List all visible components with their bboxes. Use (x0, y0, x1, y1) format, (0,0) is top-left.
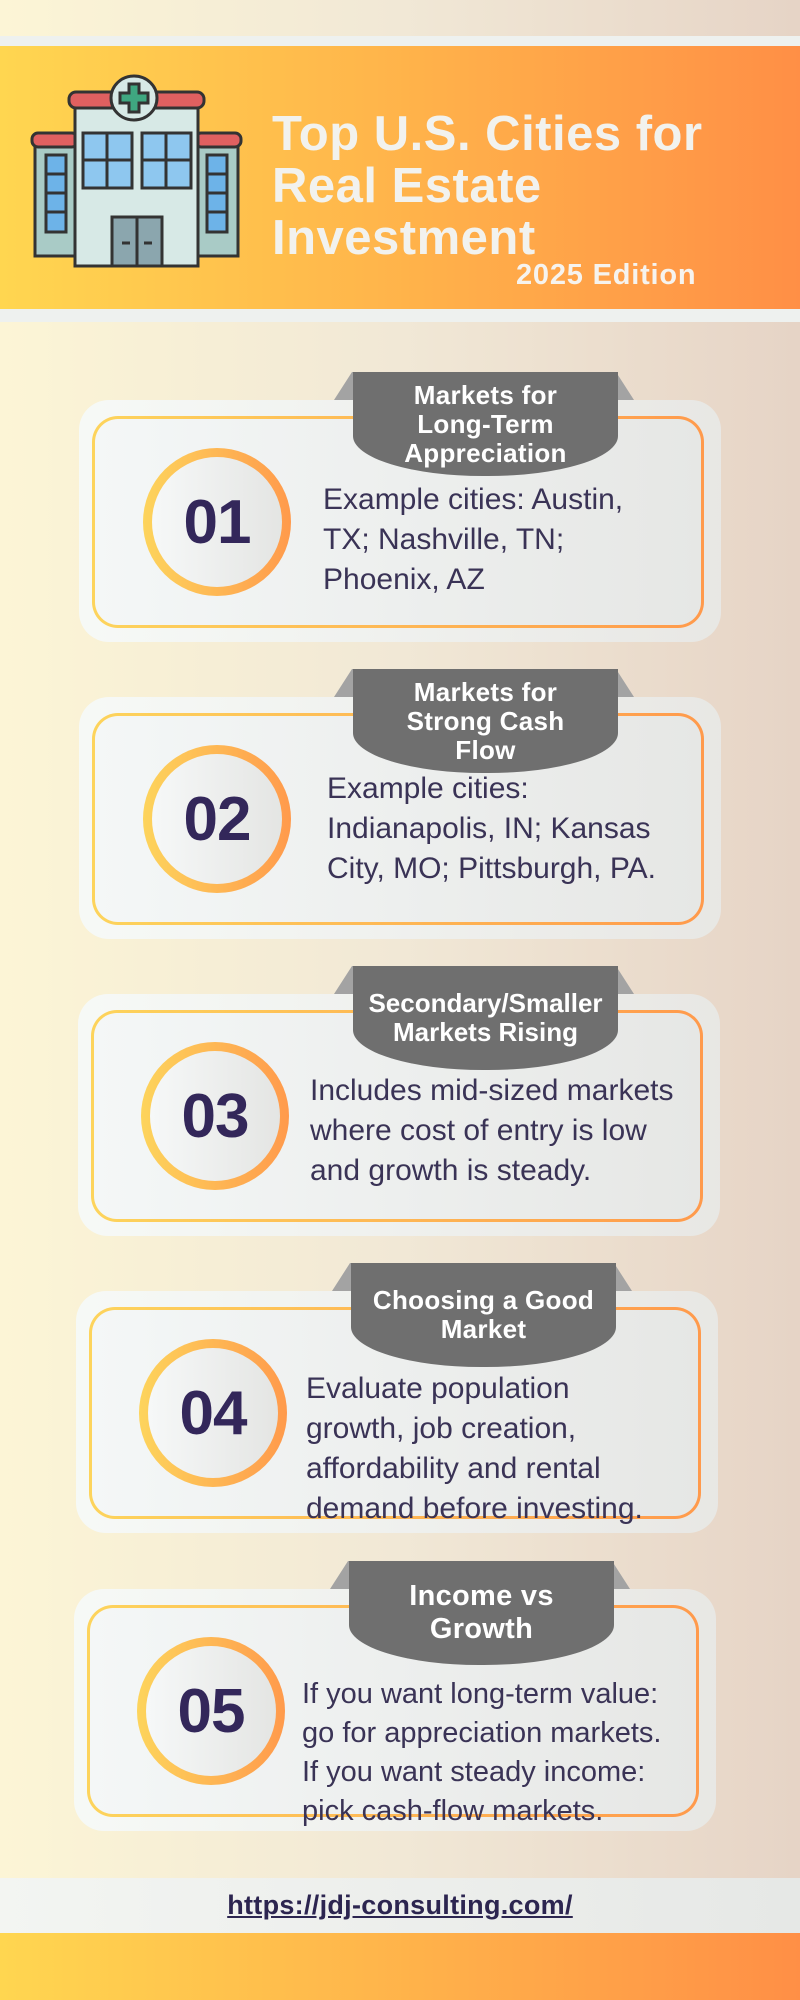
title (272, 107, 703, 265)
text 04: affordability and rental (306, 1452, 601, 1485)
ribbon heading 02: Strong Cash (407, 706, 564, 736)
footer url: https://jdj-consulting.com/ (227, 1890, 573, 1920)
ribbon heading 03: Secondary/Smaller (368, 988, 603, 1018)
title: Investment (272, 211, 536, 265)
text 01: Phoenix, AZ (323, 563, 485, 596)
text 01: TX; Nashville, TN; (323, 523, 564, 556)
text 02: City, MO; Pittsburgh, PA. (327, 852, 656, 885)
ribbon heading 04 (351, 1263, 616, 1367)
text 01 (323, 483, 623, 596)
ribbon heading 05: Income vs (409, 1580, 554, 1612)
header band (0, 46, 800, 309)
number 02: 02 (184, 784, 250, 854)
number 01: 01 (184, 488, 250, 556)
number 01 (143, 448, 291, 596)
text 01: Example cities: Austin, (323, 483, 623, 516)
text 04: demand before investing. (306, 1492, 643, 1525)
number 05 (137, 1637, 285, 1785)
number 03 (141, 1042, 289, 1190)
panel: card 02 (79, 669, 721, 939)
title: Real Estate (272, 159, 542, 213)
panel: card 03 (78, 966, 720, 1236)
title: Top U.S. Cities for (272, 107, 703, 161)
number 04: 04 (180, 1378, 246, 1448)
ribbon heading 02: Flow (455, 734, 516, 764)
text 05: go for appreciation markets. (302, 1717, 661, 1749)
text 05: If you want long-term value: (302, 1678, 658, 1710)
icon: building (30, 74, 242, 268)
number 04 (139, 1339, 287, 1487)
text 02 (327, 772, 656, 885)
text 02: Indianapolis, IN; Kansas (327, 812, 651, 845)
bottom band (0, 1933, 800, 2000)
ribbon heading 01: Long-Term (417, 408, 554, 438)
ribbon heading 05 (349, 1561, 614, 1665)
text 05: If you want steady income: (302, 1756, 645, 1788)
number 03: 03 (182, 1082, 248, 1150)
text 04: growth, job creation, (306, 1412, 576, 1445)
ribbon heading 01: Appreciation (404, 438, 567, 468)
ribbon heading 01: Markets for (414, 380, 557, 410)
text 03: where cost of entry is low (310, 1114, 647, 1147)
ribbon heading 02 (353, 669, 618, 773)
text 03 (310, 1074, 673, 1187)
number 05: 05 (178, 1676, 244, 1746)
number 02 (143, 745, 291, 893)
subtitle: 2025 Edition (516, 259, 696, 291)
panel: card 01 (79, 372, 721, 642)
footer band (0, 1878, 800, 1933)
ribbon heading 04: Market (441, 1314, 526, 1344)
ribbon heading 05: Growth (430, 1613, 533, 1645)
panel: card 04 (76, 1263, 718, 1533)
ribbon heading 02: Markets for (414, 676, 557, 706)
text 04 (306, 1372, 643, 1525)
text 02: Example cities: (327, 772, 529, 805)
stripe (0, 309, 800, 322)
text 03: and growth is steady. (310, 1154, 591, 1187)
ribbon heading 03 (353, 966, 618, 1070)
top stripe (0, 36, 800, 46)
text 04: Evaluate population (306, 1372, 570, 1405)
text 05: pick cash-flow markets. (302, 1795, 603, 1827)
text 05 (302, 1678, 661, 1827)
ribbon heading 03: Markets Rising (393, 1017, 578, 1047)
ribbon heading 01 (353, 372, 618, 476)
ribbon heading 04: Choosing a Good (373, 1285, 594, 1315)
panel: card 05 (74, 1561, 716, 1831)
text 03: Includes mid-sized markets (310, 1074, 673, 1107)
